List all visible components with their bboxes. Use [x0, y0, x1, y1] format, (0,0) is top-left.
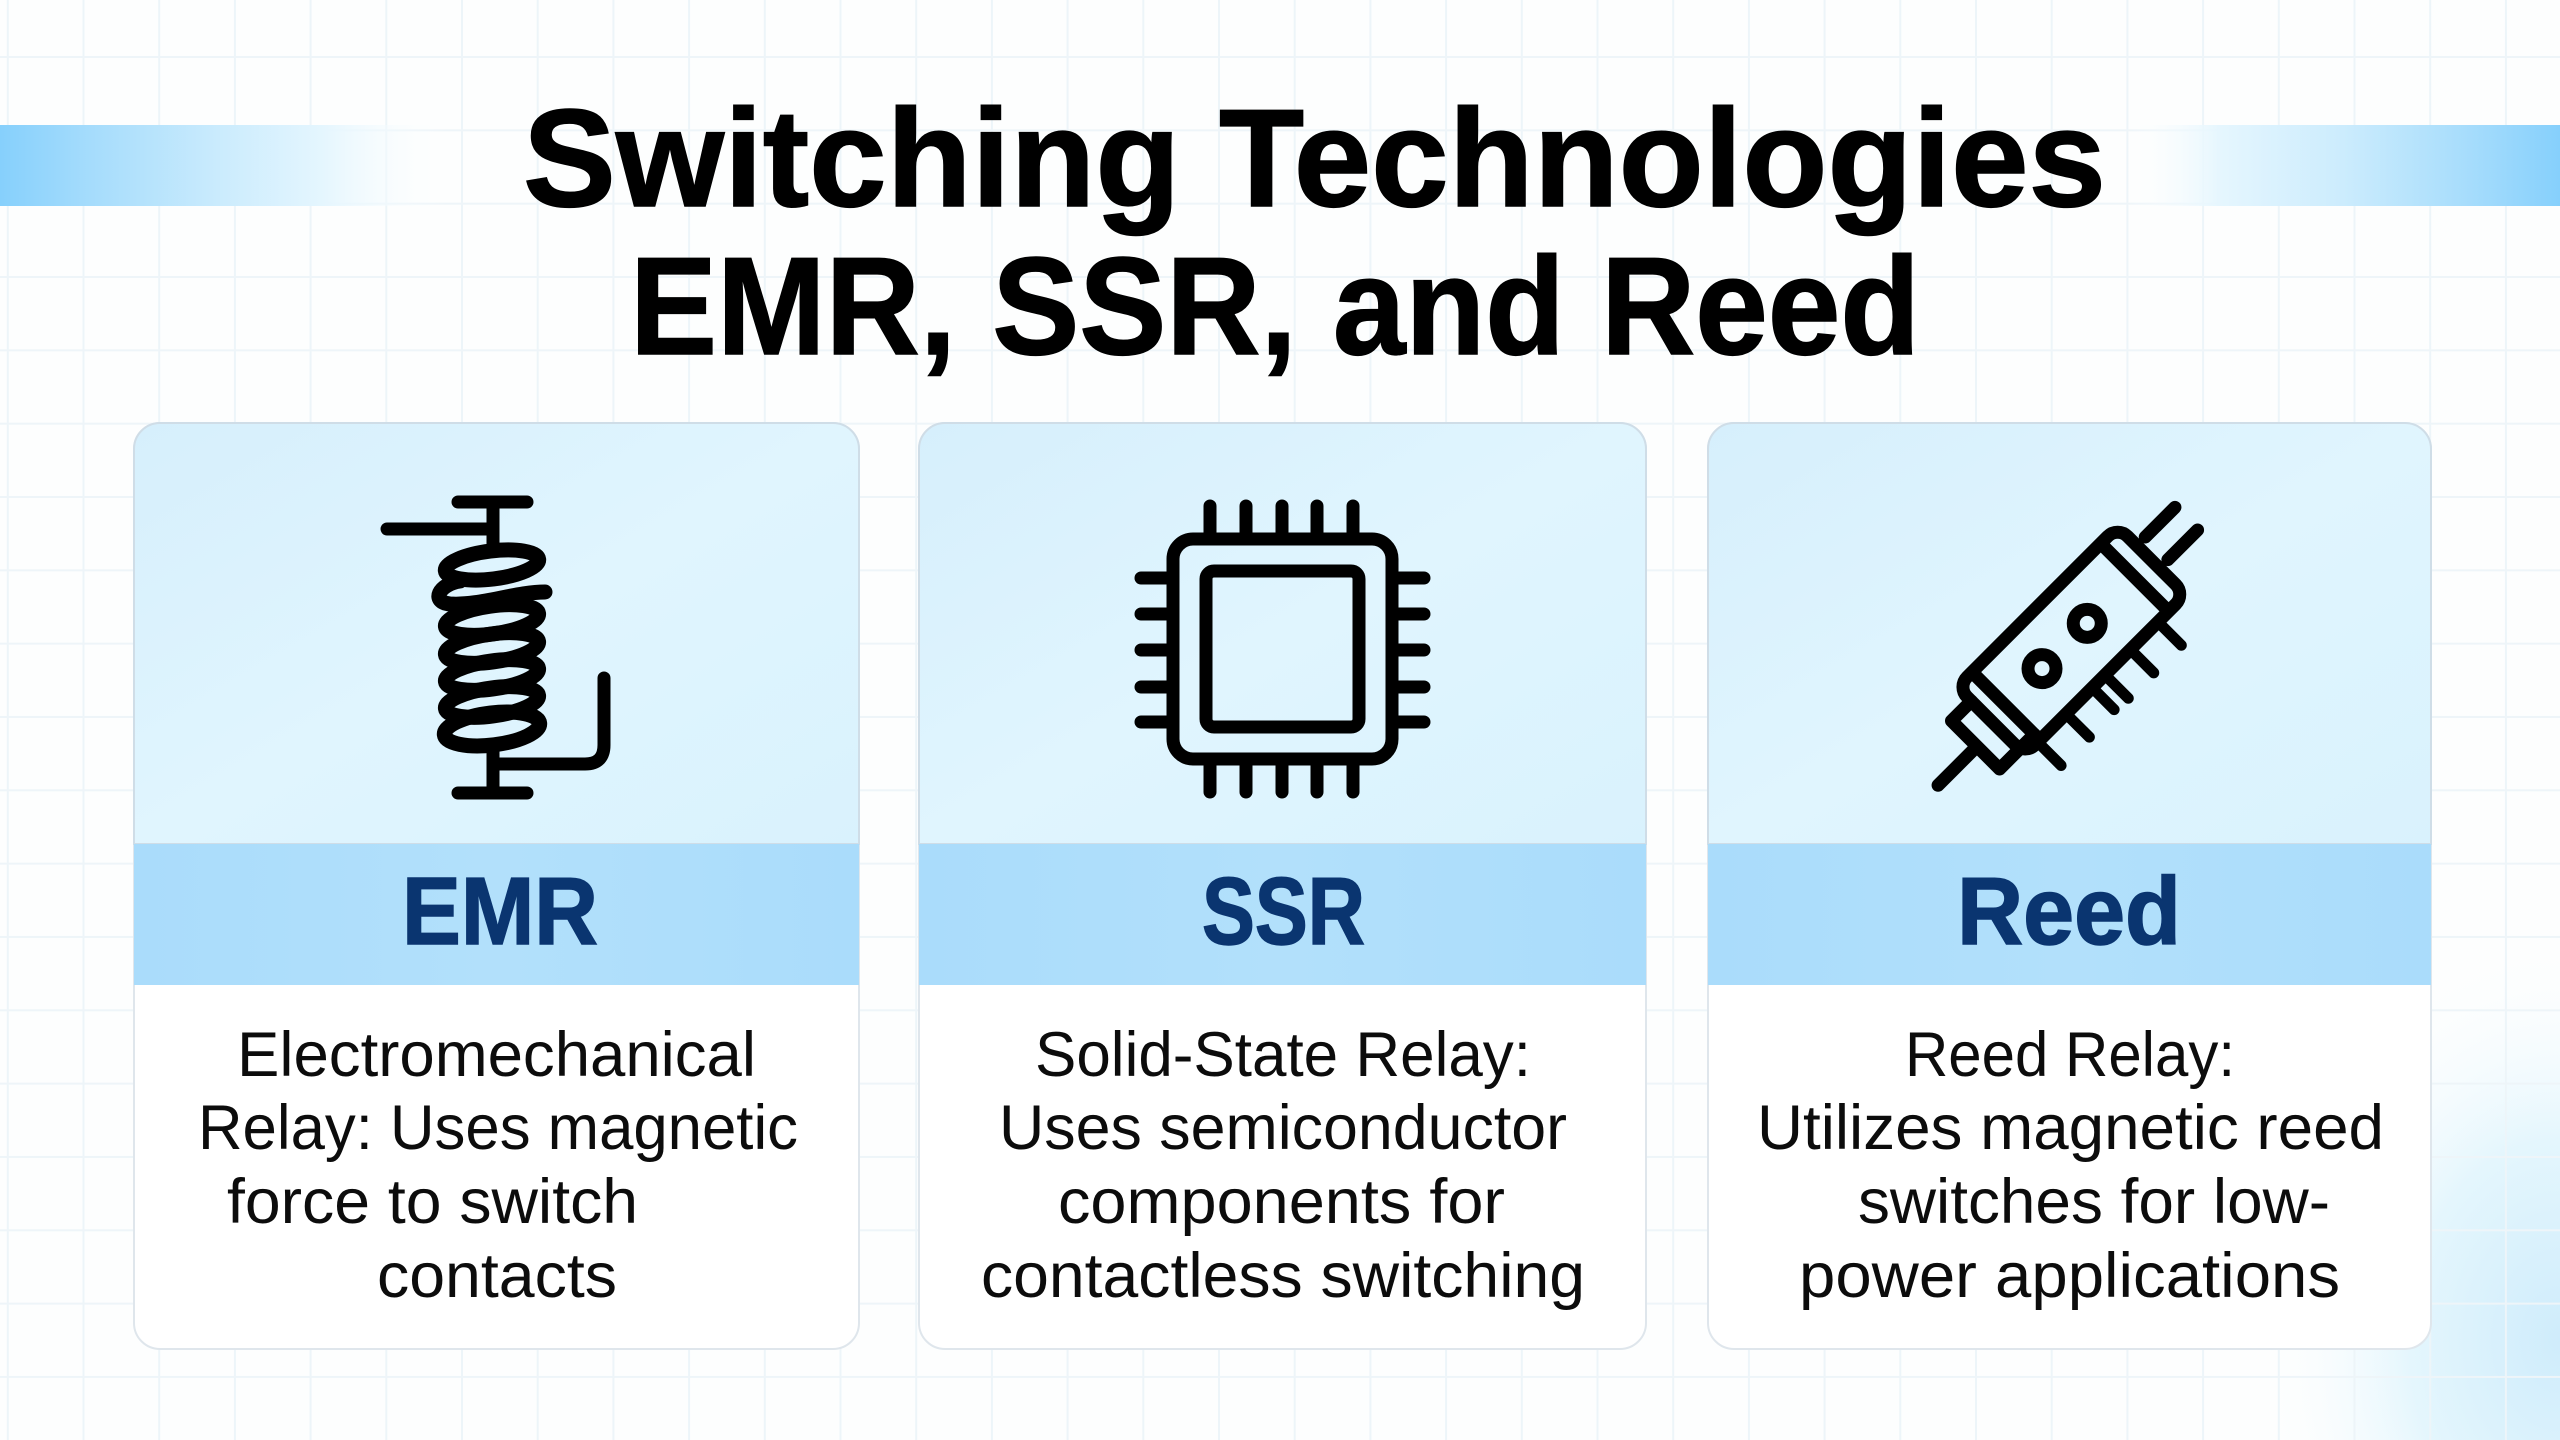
title [523, 81, 2106, 384]
title: Switching Technologies [523, 81, 2106, 236]
icon: coil [387, 502, 604, 793]
description: EMR: Electromechanical [237, 1020, 756, 1090]
panel: Reed [1708, 423, 2431, 1349]
icon: reed switch [1898, 488, 2247, 837]
description: EMR [198, 1020, 798, 1311]
description: SSR: contactless switching [981, 1241, 1585, 1311]
description: Reed: power applications [1799, 1241, 2340, 1311]
label band: Reed [1708, 844, 2431, 985]
label band: Reed: Reed [1957, 858, 2181, 965]
description: EMR: force to switch [227, 1167, 638, 1237]
description: SSR: components for [1058, 1167, 1505, 1237]
description: SSR: Uses semiconductor [999, 1093, 1567, 1163]
label band: SSR [919, 844, 1646, 985]
left header bar [0, 125, 450, 206]
label band: EMR: EMR [402, 858, 598, 965]
panel: EMR [134, 423, 859, 1349]
icon: chip [1141, 506, 1424, 792]
description: Reed: Reed Relay: [1905, 1020, 2235, 1090]
description: SSR: Solid-State Relay: [1035, 1020, 1531, 1090]
description: SSR [981, 1020, 1585, 1311]
description: Reed: Utilizes magnetic reed [1757, 1093, 2384, 1163]
description: Reed: switches for low- [1858, 1167, 2330, 1237]
right header bar [2125, 125, 2560, 206]
panel: SSR [919, 423, 1646, 1349]
label band: EMR [134, 844, 859, 985]
description: EMR: Relay: Uses magnetic [198, 1093, 798, 1163]
description: Reed [1757, 1020, 2384, 1311]
description: EMR: contacts [377, 1241, 617, 1311]
title: EMR, SSR, and Reed [630, 229, 1920, 384]
label band: SSR: SSR [1202, 858, 1365, 965]
